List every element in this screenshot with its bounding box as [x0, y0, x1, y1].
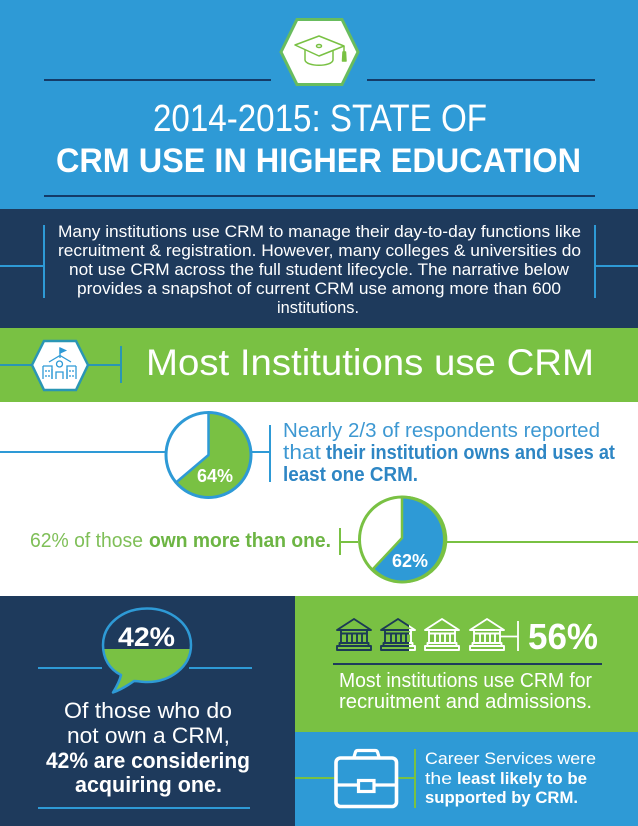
icon: speech bubble 42%: 42% — [118, 622, 175, 652]
text: career services: supported by CRM. — [425, 788, 578, 807]
text: career services: Career Services were — [425, 749, 596, 768]
text: considering: Of those who do — [64, 698, 232, 723]
text: career services — [425, 749, 596, 807]
intro text: institutions. — [277, 298, 359, 317]
right bracket — [595, 225, 638, 298]
text: respondents: Nearly 2/3 of respondents reported — [283, 420, 600, 442]
icon: school building in hexagon — [32, 341, 88, 390]
intro text: recruitment & registration. However, many colleges & universities do — [58, 241, 581, 260]
pie chart: 64% — [0, 412, 270, 498]
icon: four institution buildings — [337, 619, 518, 651]
text: respondents: that — [283, 442, 322, 464]
text: respondents: their institution owns and uses at — [326, 442, 615, 464]
pie chart: 62% — [340, 497, 638, 582]
intro text: not use CRM across the full student lifecycle. The narrative below — [69, 260, 570, 279]
text: recruitment — [339, 670, 592, 713]
text: considering: not own a CRM, — [67, 723, 230, 748]
title: CRM USE IN HIGHER EDUCATION — [56, 142, 581, 180]
text: recruitment: recruitment and admissions. — [339, 691, 592, 713]
statistic: 56%: 56% — [528, 616, 598, 657]
header rule bottom — [44, 195, 595, 197]
panel: introduction — [0, 209, 638, 328]
title — [56, 98, 581, 180]
left bracket — [0, 225, 44, 298]
icon: speech bubble 42% — [38, 608, 252, 692]
intro text: provides a snapshot of current CRM use among more than 600 — [77, 279, 561, 298]
header background — [0, 0, 638, 209]
text: own more than one: own more than one. — [149, 530, 331, 552]
intro text: Many institutions use CRM to manage their day-to-day functions like — [58, 222, 581, 241]
text: own more than one: 62% of those — [30, 530, 143, 552]
panel: section heading — [0, 328, 638, 402]
text: career services: the — [425, 769, 452, 788]
panel: recruitment and admissions — [295, 596, 638, 732]
icon: graduation cap in hexagon — [281, 20, 358, 84]
intro text — [58, 222, 581, 317]
title: 2014-2015: STATE OF — [153, 98, 487, 140]
text: recruitment: Most institutions use CRM for — [339, 670, 592, 692]
text: own more than one — [30, 530, 331, 552]
text: career services: least likely to be — [457, 769, 587, 788]
panel: career services — [295, 732, 638, 826]
text: considering: 42% are considering — [46, 748, 250, 773]
pie chart: 62%: 62% — [392, 551, 428, 571]
heading text: Most Institutions use CRM — [146, 342, 594, 383]
text: considering: acquiring one. — [75, 772, 222, 797]
text: respondents — [270, 420, 615, 486]
icon: briefcase — [295, 749, 415, 808]
text: respondents: least one CRM. — [283, 464, 418, 486]
connector — [0, 346, 121, 383]
header rule left — [44, 79, 271, 81]
text: considering — [46, 698, 250, 797]
pie chart: 64%: 64% — [197, 466, 233, 486]
panel: considering acquiring — [0, 596, 295, 826]
panel: ownership — [0, 402, 638, 595]
header rule right — [367, 79, 595, 81]
